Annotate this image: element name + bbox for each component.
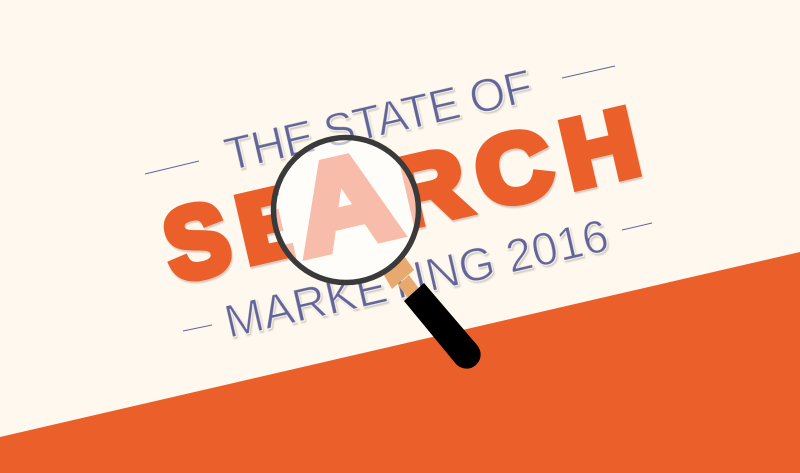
heading: search: S — [154, 180, 240, 303]
lens with magnified letters: E — [188, 152, 304, 307]
rule: top right — [562, 66, 615, 78]
icon: magnifying glass — [270, 134, 481, 369]
magnifier handle — [404, 283, 481, 369]
lens with magnified letters: THE STATE OF — [220, 59, 537, 181]
rule: bottom left — [183, 325, 212, 331]
rule: bottom right — [622, 223, 652, 230]
rule: top left — [145, 161, 199, 174]
heading: search: EARCH — [227, 89, 649, 284]
lens with magnified letters: A — [280, 124, 410, 283]
heading: the state of: THE STATE OF — [220, 59, 537, 181]
orange diagonal band — [0, 252, 800, 473]
lens with magnified letters: R — [387, 106, 510, 263]
heading: marketing 2016: MARKETING 2016 — [220, 209, 613, 348]
magnifier neck — [398, 275, 420, 298]
magnifier collar — [378, 250, 414, 289]
